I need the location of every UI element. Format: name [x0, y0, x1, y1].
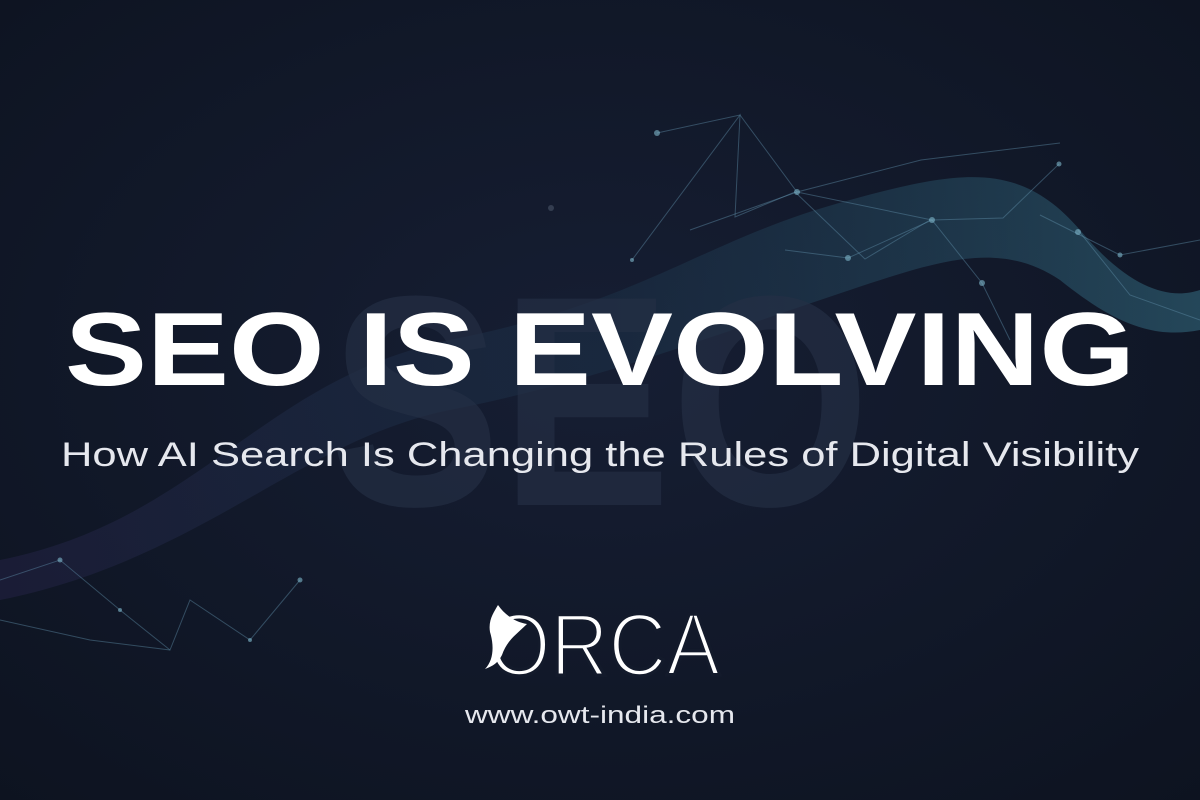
- background network lines: [0, 115, 1200, 650]
- icon: orca: [485, 605, 527, 669]
- subtitle: How AI Search Is Changing the Rules of Digital Visibility: [61, 436, 1139, 474]
- background network dots: [58, 130, 1122, 642]
- logo: ORCA: ORCA: [488, 595, 720, 694]
- background wave band: [0, 177, 1200, 600]
- website url: www.owt-india.com: [464, 702, 735, 729]
- watermark: SEO: SEO: [330, 233, 870, 569]
- title: SEO IS EVOLVING: [65, 292, 1135, 408]
